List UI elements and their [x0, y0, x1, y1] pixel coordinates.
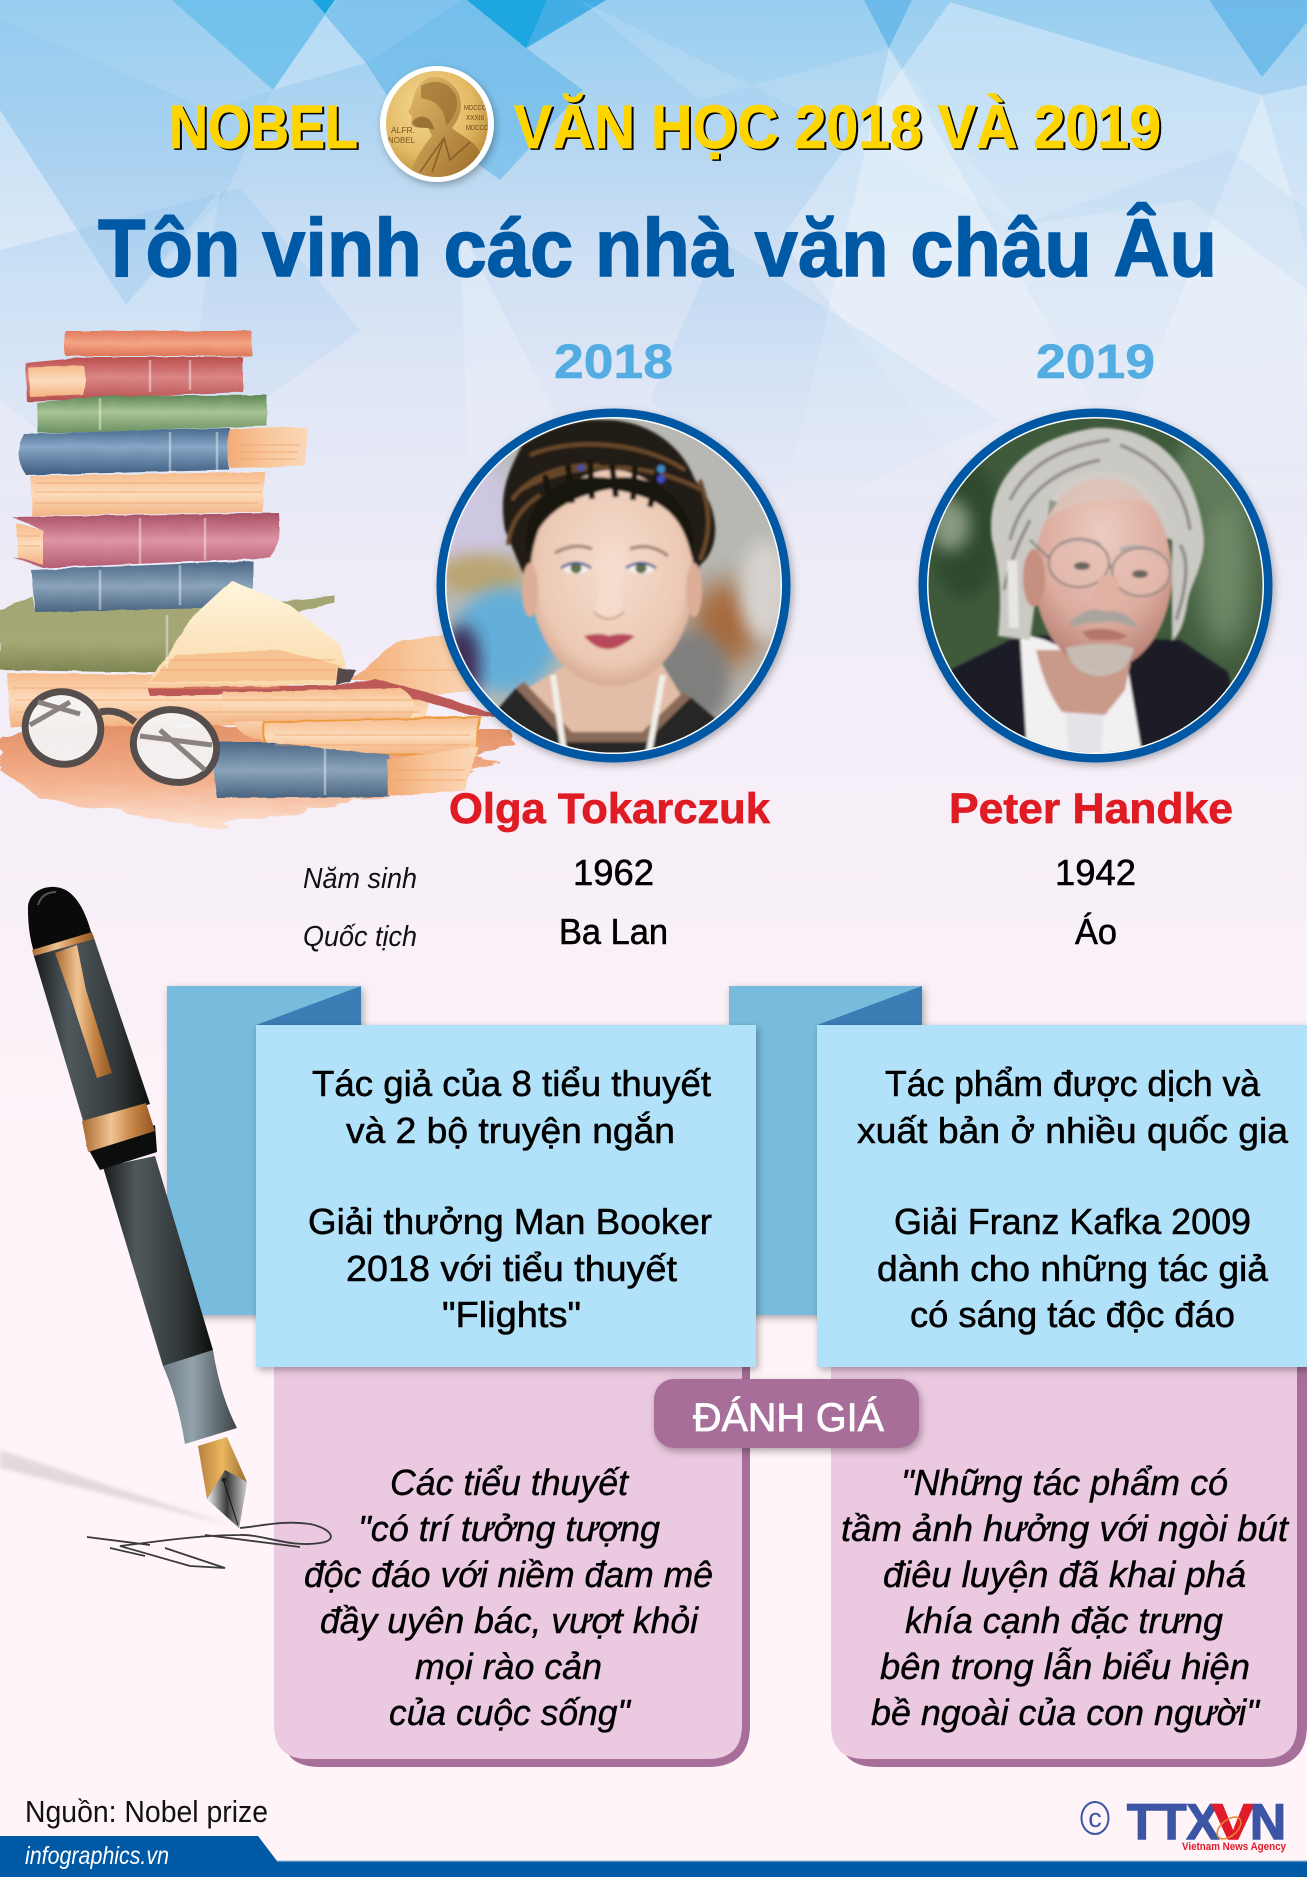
icon: eyeglasses — [15, 681, 225, 792]
title: NOBEL VĂN HỌC 2018 VÀ 2019: NOBEL — [171, 94, 360, 162]
title: NOBEL VĂN HỌC 2018 VÀ 2019: NOBEL — [169, 93, 358, 161]
text: review Peter: bề ngoài của con người" — [871, 1692, 1261, 1733]
logo: TTXVN: N — [1250, 1794, 1286, 1850]
icon: Nobel gold medal: XXXIII — [466, 115, 484, 122]
heading: Tôn vinh các nhà văn châu Âu: Tôn vinh các nhà văn châu Âu — [98, 203, 1217, 294]
logo: TTXVN: Vietnam News Agency — [1182, 1841, 1287, 1853]
name: Olga Tokarczuk: Olga Tokarczuk — [449, 785, 770, 833]
text: facts Peter: Giải Franz Kafka 2009 — [894, 1201, 1251, 1242]
birth year 1962: 1962 — [573, 852, 654, 893]
badge: ĐÁNH GIÁ: ĐÁNH GIÁ — [693, 1395, 884, 1440]
text: review Olga: đầy uyên bác, vượt khỏi — [320, 1600, 699, 1641]
text: facts Peter: dành cho những tác giả — [877, 1248, 1269, 1289]
title: NOBEL VĂN HỌC 2018 VÀ 2019 — [169, 93, 1163, 162]
title: NOBEL VĂN HỌC 2018 VÀ 2019: VĂN HỌC 2018 VÀ 2019 — [516, 94, 1163, 162]
text: facts Olga: Tác giả của 8 tiểu thuyết — [312, 1063, 711, 1104]
text: review Peter: "Những tác phẩm có — [901, 1462, 1228, 1503]
illustration: stack of books and glasses — [0, 331, 515, 828]
badge: ĐÁNH GIÁ — [654, 1379, 919, 1448]
footer bar: infographics.vn — [25, 1842, 169, 1870]
text: facts Peter: Tác phẩm được dịch và — [885, 1063, 1261, 1104]
year label 2018: 2018 — [554, 336, 673, 389]
row label: Năm sinh: Năm sinh — [303, 863, 417, 895]
icon: Nobel gold medal: NOBEL — [388, 136, 416, 145]
text: facts Peter: xuất bản ở nhiều quốc gia — [857, 1110, 1289, 1151]
logo: TTXVN: V — [1212, 1794, 1255, 1850]
text: review Peter: tầm ảnh hưởng với ngòi bút — [841, 1508, 1290, 1549]
row label: Quốc tịch: Quốc tịch — [303, 921, 417, 953]
icon: Nobel gold medal: ALFR. — [391, 126, 415, 135]
icon: Nobel gold medal: MDCCC — [464, 105, 486, 112]
panel: facts Peter (folded blue card) — [729, 986, 1307, 1367]
text: facts Peter: có sáng tác độc đáo — [910, 1294, 1235, 1335]
portrait: Olga Tokarczuk — [420, 408, 790, 770]
source note: Nguồn: Nobel prize — [25, 1794, 268, 1829]
portrait: Peter Handke — [918, 408, 1272, 770]
text: facts Olga — [308, 1063, 712, 1335]
panel: review Olga (pink) — [274, 1300, 750, 1767]
title: NOBEL VĂN HỌC 2018 VÀ 2019: VĂN HỌC 2018 VÀ 2019 — [514, 93, 1161, 161]
text: review Peter: khía cạnh đặc trưng — [905, 1600, 1223, 1641]
birth year 1942: 1942 — [1055, 852, 1136, 893]
text: review Olga: Các tiểu thuyết — [390, 1462, 630, 1503]
icon: Nobel gold medal: MDCCC — [466, 125, 488, 132]
icon: Nobel gold medal — [380, 66, 494, 182]
text: facts Olga: "Flights" — [442, 1294, 581, 1335]
text: review Peter: điêu luyện đã khai phá — [883, 1554, 1246, 1595]
text: facts Olga: và 2 bộ truyện ngắn — [346, 1110, 675, 1151]
panel: review Peter (pink) — [831, 1300, 1307, 1767]
text: review Peter — [841, 1462, 1290, 1733]
text: review Olga — [304, 1462, 713, 1733]
text: review Olga: mọi rào cản — [415, 1646, 602, 1687]
icon: fountain pen with signature — [0, 887, 331, 1568]
logo: TTXVN: c — [1088, 1803, 1102, 1833]
panel: facts Olga (folded blue card) — [167, 986, 756, 1367]
footer bar — [0, 1836, 1307, 1877]
text: review Olga: độc đáo với niềm đam mê — [304, 1554, 713, 1595]
text: review Peter: bên trong lẫn biểu hiện — [880, 1646, 1250, 1687]
text: facts Olga: Giải thưởng Man Booker — [308, 1201, 712, 1242]
text: review Olga: "có trí tưởng tượng — [358, 1508, 660, 1549]
text: facts Peter — [857, 1063, 1289, 1335]
text: review Olga: của cuộc sống" — [389, 1692, 632, 1733]
logo: TTXVN: TTX — [1127, 1794, 1219, 1850]
year label 2019: 2019 — [1036, 336, 1155, 389]
nationality: Áo: Áo — [1075, 911, 1117, 952]
logo: TTXVN — [1082, 1794, 1287, 1853]
text: facts Olga: 2018 với tiểu thuyết — [346, 1248, 677, 1289]
name: Peter Handke: Peter Handke — [949, 785, 1233, 833]
nationality: Ba Lan: Ba Lan — [559, 911, 668, 952]
